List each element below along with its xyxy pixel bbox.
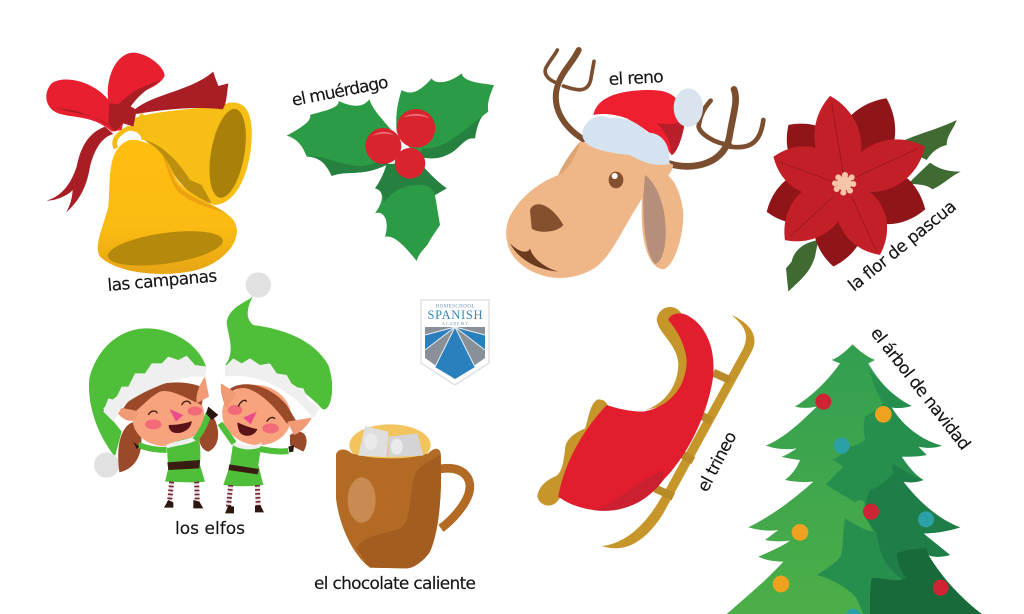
antlers: [545, 50, 763, 166]
face: [128, 382, 209, 452]
label: el trineo: el trineo: [694, 428, 741, 495]
mid foliage: [817, 368, 982, 614]
label: el árbol de navidad: el árbol de navidad: [866, 324, 974, 454]
illustration: el chocolate caliente (hot chocolate mug): [336, 424, 470, 568]
logo text: HOMESCHOOL: [436, 304, 474, 310]
hair: [118, 415, 218, 472]
illustration: la flor de pascua (poinsettia): [758, 86, 961, 292]
logo: Homeschool Spanish Academy: SPANISH: [428, 308, 482, 322]
darkest foliage: [870, 548, 982, 614]
bell rings: [115, 115, 144, 148]
mug body: [336, 449, 441, 568]
right elf: [217, 272, 332, 513]
nose: [530, 204, 563, 232]
back bell: [130, 102, 252, 205]
label: la flor de pascua: la flor de pascua: [845, 197, 961, 296]
eye: [609, 172, 623, 188]
illustration: el muérdago (mistletoe): [287, 73, 494, 261]
hat: [89, 328, 207, 457]
ear: [642, 171, 683, 269]
back petals: [758, 86, 934, 270]
label: las campanas: las campanas: [107, 266, 218, 296]
hair: [290, 432, 307, 452]
gold trim: [537, 307, 697, 506]
illustration: el árbol de navidad (Christmas tree): [727, 344, 982, 614]
handle: [439, 468, 470, 528]
red body: [558, 313, 714, 511]
santa hat: [582, 88, 703, 165]
illustration: el reno (reindeer): [506, 50, 763, 278]
ornaments: [773, 394, 949, 614]
right leaf: [396, 73, 494, 158]
body: [165, 435, 205, 482]
left leaf: [287, 99, 393, 176]
front bell: [98, 140, 237, 274]
ribbon bow: [46, 53, 165, 132]
fur trim: [103, 356, 207, 422]
foam: [349, 424, 431, 466]
bottom leaf: [375, 163, 447, 261]
flower centre: [832, 172, 856, 196]
face: [217, 378, 297, 452]
logo: Homeschool Spanish Academy: [421, 300, 489, 385]
left elf: [89, 328, 218, 508]
leaves: [786, 120, 961, 292]
berries: [365, 109, 435, 179]
illustration: los elfos (elves): [89, 272, 332, 513]
features: [145, 401, 202, 433]
features: [228, 400, 279, 436]
logo: Homeschool Spanish Academy: ACADEMY: [442, 321, 468, 326]
front petals: [765, 92, 935, 265]
runner: [602, 315, 755, 548]
label: el muérdago: el muérdago: [290, 73, 390, 111]
mouth: [510, 243, 558, 272]
illustration: el trineo (sleigh): [537, 307, 755, 548]
head: [506, 142, 673, 278]
fur trim: [225, 358, 320, 418]
illustration: las campanas (bells): [46, 53, 252, 274]
ribbon tails: [47, 72, 228, 213]
dark foliage: [863, 463, 982, 614]
label: los elfos: los elfos: [175, 519, 245, 539]
marshmallows: [358, 426, 423, 457]
label: el reno: el reno: [608, 67, 664, 90]
hat: [225, 295, 332, 409]
light foliage: [727, 344, 982, 614]
body: [223, 442, 263, 486]
petal veins: [778, 103, 918, 252]
label: el chocolate caliente: el chocolate caliente: [314, 574, 476, 594]
highlight: [348, 477, 376, 523]
